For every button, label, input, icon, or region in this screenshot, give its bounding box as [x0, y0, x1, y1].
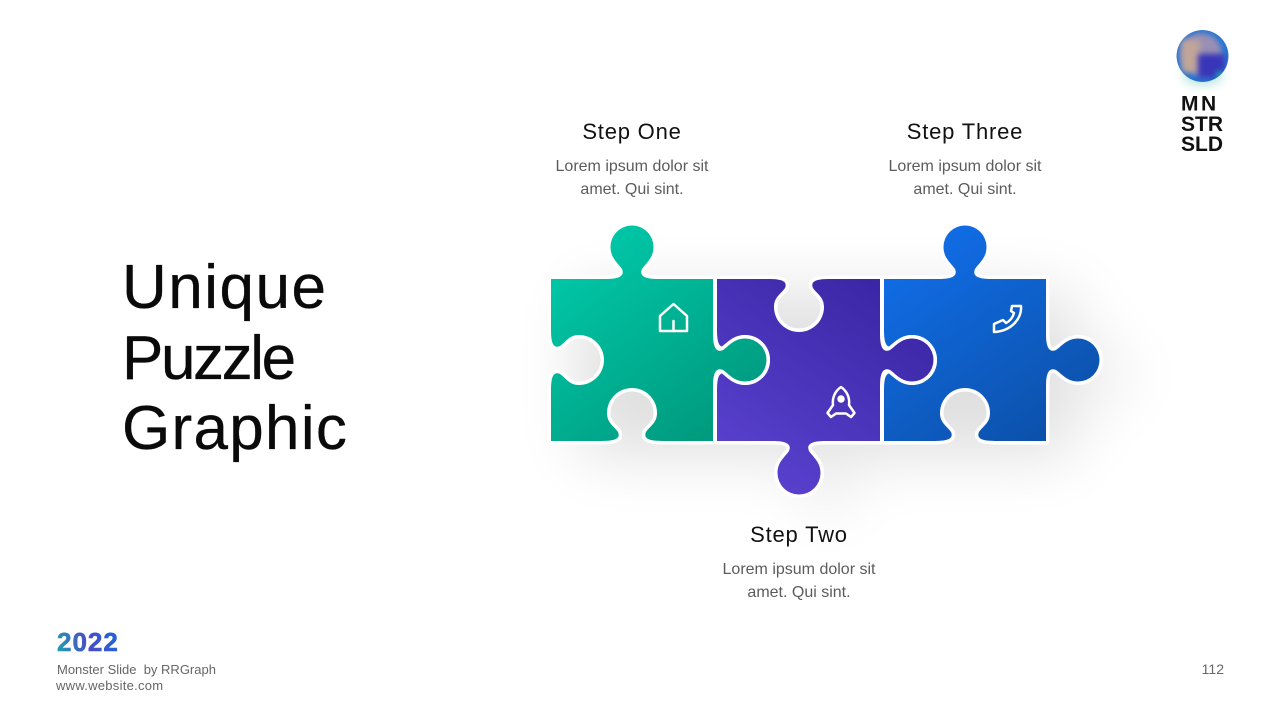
piece: step two: [717, 279, 934, 494]
title: [122, 253, 348, 463]
title: Puzzle: [122, 324, 294, 393]
logo wordmark: [1181, 92, 1223, 156]
step three text: amet. Qui sint.: [913, 181, 1017, 198]
page number: 112: [1202, 661, 1224, 677]
step two text: Lorem ipsum dolor sit: [723, 561, 876, 578]
puzzle drop shadow: [579, 293, 1127, 508]
logo: [1176, 30, 1228, 156]
year: 2022: [57, 627, 119, 657]
piece: step three: [884, 226, 1100, 441]
icon: phone: [994, 306, 1021, 332]
footer credit: Monster Slide by RRGraph: [57, 662, 216, 677]
logo wordmark: STR: [1181, 113, 1223, 136]
step two text: Step Two: [750, 522, 848, 547]
step two text: [723, 522, 876, 601]
step three text: [889, 119, 1042, 198]
step one text: [556, 119, 709, 198]
puzzle graphic: [551, 226, 1100, 494]
footer credit: www.website.com: [55, 678, 163, 693]
icon: home: [660, 304, 687, 331]
piece: step one: [551, 226, 766, 441]
footer credit: [55, 662, 216, 693]
icon: rocket: [828, 387, 854, 417]
logo glow: [1183, 67, 1223, 85]
logo wordmark: MN: [1181, 92, 1219, 116]
step two text: amet. Qui sint.: [747, 584, 851, 601]
step one text: Lorem ipsum dolor sit: [556, 158, 709, 175]
logo wordmark: SLD: [1181, 133, 1223, 156]
logo sphere: [1176, 30, 1228, 82]
step three text: Step Three: [907, 119, 1023, 144]
step one text: amet. Qui sint.: [580, 181, 684, 198]
title: Unique: [122, 253, 327, 322]
step three text: Lorem ipsum dolor sit: [889, 158, 1042, 175]
step one text: Step One: [582, 119, 682, 144]
title: Graphic: [122, 394, 348, 463]
